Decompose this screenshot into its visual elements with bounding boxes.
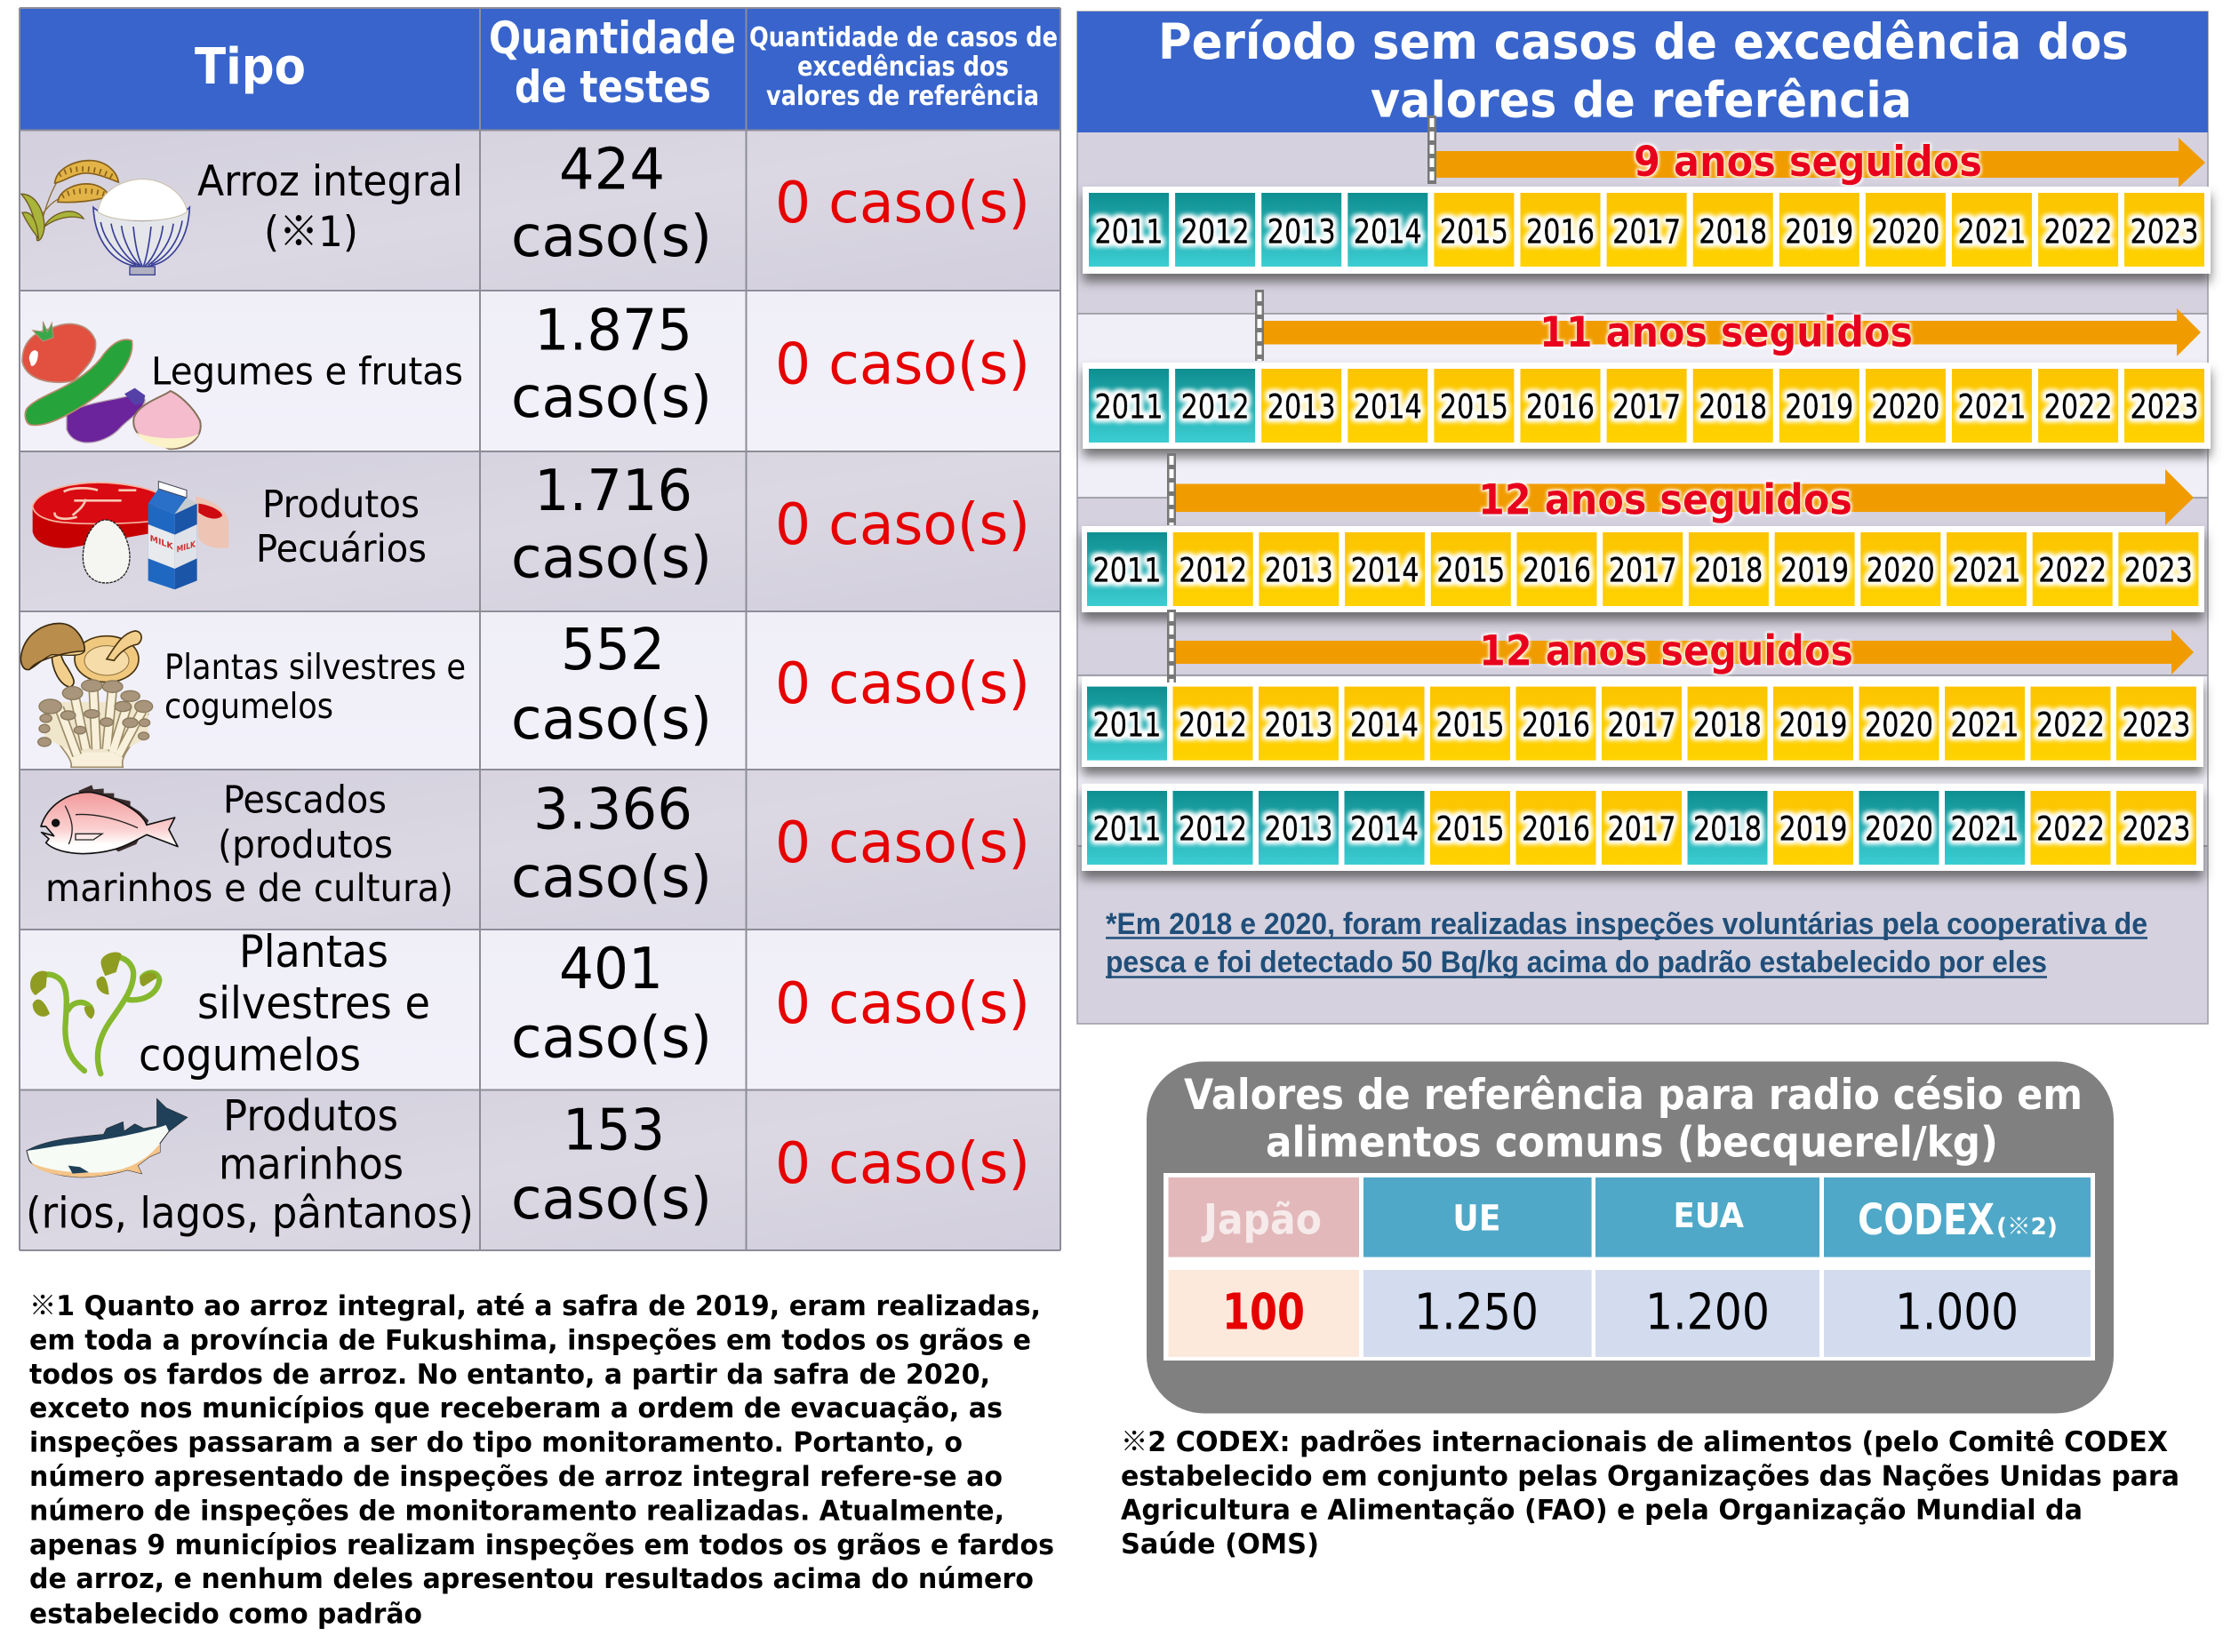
count: 1.716 xyxy=(511,459,712,592)
year labels: 2014 xyxy=(1354,387,1422,427)
footnote 1: arroz integral xyxy=(29,1283,1054,1630)
year labels: 2022 xyxy=(2036,706,2105,745)
year labels: 2019 xyxy=(1780,552,1849,590)
count: 424: caso(s) xyxy=(511,204,712,270)
count: 401 xyxy=(511,937,712,1072)
label: Produtos Pecuários xyxy=(256,483,427,571)
result: 0: 0 caso(s) xyxy=(775,1131,1030,1197)
year labels: 2015 xyxy=(1436,706,1504,745)
label: Produtos Pecuários: Pecuários xyxy=(256,527,427,571)
year labels: 2022 xyxy=(2044,213,2113,251)
year labels: 2016 xyxy=(1523,552,1591,590)
timeline 4: 12 years xyxy=(1082,610,2203,767)
count: 552: caso(s) xyxy=(511,687,712,753)
year strip xyxy=(1083,187,2211,274)
note: voluntary inspections: pesca e foi detectado 50 Bq/kg acima do padrão estabelecido por eles xyxy=(1106,946,2047,979)
footnote 2: CODEX: Agricultura e Alimentação (FAO) e pela Organização Mundial da xyxy=(1121,1495,2083,1527)
year labels: 2021 xyxy=(1950,810,2019,849)
year labels: 2019 xyxy=(1779,810,1847,849)
year labels: 2013 xyxy=(1264,810,1333,849)
year labels: 2016 xyxy=(1522,706,1590,745)
footnote 1: arroz integral: exceto nos municípios que receberam a ordem de evacuação, as xyxy=(29,1393,1003,1425)
label: Pescados: (produtos xyxy=(218,823,393,867)
year labels: 2018 xyxy=(1693,706,1762,745)
year labels: 2020 xyxy=(1865,706,1933,745)
column: CODEX: CODEX xyxy=(1858,1195,1995,1245)
arrow label: 9 anos seguidos xyxy=(1634,138,1982,187)
count: 1.875: 1.875 xyxy=(534,299,692,364)
year labels: 2012 xyxy=(1179,706,1247,745)
label: Arroz integral xyxy=(197,157,463,259)
label: Produtos marinhos: Produtos xyxy=(223,1091,398,1141)
row: Pescados xyxy=(41,777,1030,911)
year labels: 2020 xyxy=(1865,810,1933,849)
label: Arroz integral: (※1) xyxy=(264,197,358,259)
year labels: 2023 xyxy=(2130,213,2199,251)
year labels: 2015 xyxy=(1440,213,1508,251)
year labels: 2014 xyxy=(1354,213,1422,251)
column: Japão: Japão xyxy=(1201,1196,1322,1245)
label: Plantas silvestres e cogumelos: Plantas xyxy=(239,926,388,978)
icon: rice plant and bowl xyxy=(21,161,189,275)
year cells xyxy=(1089,369,2204,443)
year strip xyxy=(1082,784,2203,871)
column: UE xyxy=(1363,1177,1592,1357)
year labels xyxy=(1093,552,2193,590)
footnote 1: arroz integral: todos os fardos de arroz. No entanto, a partir da safra de 2020, xyxy=(29,1359,990,1391)
year labels: 2018 xyxy=(1694,552,1763,590)
column: CODEX: (※2) xyxy=(1996,1209,2058,1241)
label: Legumes e frutas: Legumes e frutas xyxy=(151,350,463,395)
icon: meat, egg and milk: MILK xyxy=(177,539,196,555)
row: Produtos Pecuários xyxy=(33,459,1030,592)
year labels: 2023 xyxy=(2123,810,2190,849)
footnote 1: arroz integral: número de inspeções de monitoramento realizadas. Atualmente, xyxy=(29,1495,1004,1527)
arrow label: 11 anos seguidos xyxy=(1539,308,1913,357)
panel title: valores de referência xyxy=(1371,72,1912,129)
footnote 1: arroz integral: estabelecido como padrão xyxy=(29,1598,422,1630)
label: Plantas silvestres e cogumelos xyxy=(139,926,430,1081)
count: 3.366: caso(s) xyxy=(511,845,712,911)
row: Legumes e frutas xyxy=(22,299,1030,449)
year labels: 2013 xyxy=(1264,706,1333,745)
year labels: 2021 xyxy=(1950,706,2019,745)
heading: Quantidade de testes xyxy=(489,12,736,113)
year labels xyxy=(1093,810,2190,849)
heading: Quantidade de testes: Quantidade xyxy=(489,12,736,64)
note: voluntary inspections xyxy=(1106,907,2147,979)
footnote 1: arroz integral: ※1 Quanto ao arroz integral, até a safra de 2019, eram realizadas, xyxy=(29,1283,1041,1323)
footnote 2: CODEX: Saúde (OMS) xyxy=(1121,1528,1319,1560)
year strip xyxy=(1082,526,2204,612)
year labels: 2012 xyxy=(1179,810,1247,849)
arrow label: 12 anos seguidos xyxy=(1478,476,1852,524)
timeline 3: 12 years xyxy=(1082,453,2204,612)
label: Pescados: Pescados xyxy=(223,778,387,823)
year cells xyxy=(1087,532,2198,606)
icon: mushrooms xyxy=(20,624,153,767)
year labels: 2012 xyxy=(1179,552,1247,590)
label: Produtos marinhos xyxy=(26,1091,474,1239)
icon: meat, egg and milk xyxy=(33,482,228,589)
year labels: 2021 xyxy=(1952,552,2021,590)
footnote 2: CODEX xyxy=(1121,1419,2179,1560)
label: Plantas silvestres e cogumelos: silvestres e xyxy=(197,978,430,1029)
arrow: 12 years xyxy=(1171,629,2194,674)
year labels: 2013 xyxy=(1265,552,1333,590)
heading: Tipo: Tipo xyxy=(195,38,306,96)
year labels: 2012 xyxy=(1181,213,1250,251)
row: Arroz integral xyxy=(21,138,1030,275)
year labels: 2011 xyxy=(1095,387,1163,427)
column: Japão xyxy=(1168,1177,1359,1357)
panel: test results table xyxy=(20,8,1060,1250)
count: 401: 401 xyxy=(559,937,663,1002)
year labels: 2017 xyxy=(1609,552,1677,590)
year labels: 2021 xyxy=(1957,387,2027,427)
panel title: alimentos comuns (becquerel/kg) xyxy=(1266,1119,1998,1168)
column: UE: UE xyxy=(1452,1199,1500,1240)
year labels: 2016 xyxy=(1522,810,1590,849)
year labels: 2020 xyxy=(1871,387,1939,427)
year labels: 2022 xyxy=(2036,810,2105,849)
arrow: 9 years xyxy=(1432,138,2205,188)
start marker xyxy=(1167,453,1176,525)
footnote 1: arroz integral: inspeções passaram a ser do tipo monitoramento. Portanto, o xyxy=(29,1427,963,1459)
result: 0: 0 caso(s) xyxy=(775,651,1030,717)
icon: fern sprouts xyxy=(30,952,159,1073)
label: Pescados xyxy=(45,778,453,911)
note: voluntary inspections: *Em 2018 e 2020, foram realizadas inspeções voluntárias pela cooperativa de xyxy=(1106,907,2147,941)
count: 552: 552 xyxy=(561,618,665,683)
year labels: 2012 xyxy=(1181,387,1250,427)
count: 3.366 xyxy=(511,777,712,911)
start marker xyxy=(1255,290,1264,361)
year labels: 2018 xyxy=(1693,810,1762,849)
panel background xyxy=(1147,1061,2114,1413)
panel: period without exceedances xyxy=(1077,12,2211,1024)
year labels: 2020 xyxy=(1871,213,1939,251)
count: 401: caso(s) xyxy=(511,1006,712,1072)
count: 153: 153 xyxy=(563,1098,665,1164)
year labels: 2015 xyxy=(1440,387,1508,427)
year labels: 2011 xyxy=(1093,706,1161,745)
heading: Quantidade de casos: valores de referência xyxy=(766,81,1039,112)
start marker xyxy=(1427,116,1436,184)
column: UE: 1.250 xyxy=(1414,1284,1539,1342)
reference table xyxy=(1163,1173,2095,1361)
footnote 2: CODEX: ※2 CODEX: padrões internacionais de alimentos (pelo Comitê CODEX xyxy=(1121,1419,2168,1459)
label: Pescados: marinhos e de cultura) xyxy=(45,866,453,911)
label: Plantas silvestres e cogumelos: Plantas silvestres e xyxy=(164,648,466,688)
column: EUA: 1.200 xyxy=(1645,1284,1770,1342)
year strip xyxy=(1082,677,2203,767)
panel title xyxy=(1184,1071,2083,1168)
year labels: 2015 xyxy=(1436,810,1504,849)
arrow: 12 years xyxy=(1171,469,2194,525)
heading: Quantidade de casos xyxy=(749,22,1058,112)
column: Japão: 100 xyxy=(1222,1284,1305,1342)
year labels xyxy=(1093,706,2190,745)
count: 153: caso(s) xyxy=(511,1167,712,1233)
count: 3.366: 3.366 xyxy=(533,777,692,842)
heading: Quantidade de casos: excedências dos xyxy=(797,52,1009,83)
year labels: 2014 xyxy=(1350,810,1419,849)
result: 0: 0 caso(s) xyxy=(775,332,1030,398)
footnote 1: arroz integral: de arroz, e nenhum deles apresentou resultados acima do número xyxy=(29,1563,1034,1595)
year labels: 2017 xyxy=(1607,810,1676,849)
count: 1.875 xyxy=(511,299,712,431)
year labels: 2011 xyxy=(1093,552,1161,590)
icon: sea bream xyxy=(41,785,178,854)
year labels: 2013 xyxy=(1267,387,1336,427)
panel: reference values xyxy=(1147,1061,2114,1413)
column: CODEX xyxy=(1824,1177,2091,1357)
label: Produtos Pecuários: Produtos xyxy=(262,483,420,527)
count: 1.716: 1.716 xyxy=(534,459,692,524)
column: CODEX: 1.000 xyxy=(1895,1284,2019,1342)
start marker xyxy=(1167,610,1176,682)
timeline 2: 11 years xyxy=(1083,290,2211,449)
year labels: 2023 xyxy=(2130,387,2199,427)
footnote 1: arroz integral: número apresentado de inspeções de arroz integral refere-se ao xyxy=(29,1461,1003,1493)
panel title: Período sem casos de excedência dos xyxy=(1158,13,2129,70)
year labels: 2019 xyxy=(1779,706,1847,745)
row: Plantas silvestres (fern) xyxy=(30,926,1030,1081)
result: 0: 0 caso(s) xyxy=(775,971,1030,1037)
table header row xyxy=(20,8,1060,130)
heading: Quantidade de casos: Quantidade de casos de xyxy=(749,22,1058,53)
result: 0: 0 caso(s) xyxy=(775,492,1030,558)
panel title: Valores de referência para radio césio em xyxy=(1184,1071,2083,1120)
count: 1.875: caso(s) xyxy=(511,365,712,431)
count: 424 xyxy=(511,138,712,270)
year labels: 2023 xyxy=(2124,552,2193,590)
year cells xyxy=(1089,193,2204,267)
timeline 5: voluntary inspections xyxy=(1082,784,2203,871)
year labels: 2015 xyxy=(1436,552,1505,590)
panel background stripes xyxy=(1077,12,2208,1024)
label: Produtos marinhos: (rios, lagos, pântanos) xyxy=(26,1189,474,1239)
year labels: 2014 xyxy=(1351,552,1419,590)
count: 1.716: caso(s) xyxy=(511,526,712,592)
count: 552 xyxy=(511,618,712,753)
year labels: 2017 xyxy=(1612,213,1681,251)
year labels: 2018 xyxy=(1699,387,1767,427)
year labels: 2019 xyxy=(1785,387,1853,427)
year cells xyxy=(1087,791,2196,865)
count: 153 xyxy=(511,1098,712,1233)
icon: vegetables and fruits xyxy=(22,322,201,449)
timeline 1: 9 years xyxy=(1083,116,2211,274)
footnote 1: arroz integral: em toda a província de Fukushima, inspeções em todos os grãos e xyxy=(29,1324,1031,1356)
row: Produtos marinhos xyxy=(26,1091,1030,1239)
year labels: 2017 xyxy=(1612,387,1681,427)
heading: Quantidade de testes: de testes xyxy=(515,61,711,113)
icon: meat, egg and milk: MILK xyxy=(150,534,173,552)
year labels: 2022 xyxy=(2044,387,2113,427)
year labels xyxy=(1095,213,2199,251)
year labels: 2014 xyxy=(1350,706,1419,745)
year labels: 2011 xyxy=(1093,810,1161,849)
icon: salmon xyxy=(27,1099,188,1177)
label: Arroz integral: Arroz integral xyxy=(197,157,463,206)
year cells xyxy=(1087,687,2196,761)
year labels: 2016 xyxy=(1526,213,1595,251)
label: Plantas silvestres e cogumelos: cogumelos xyxy=(139,1029,361,1081)
footnote 1: arroz integral: apenas 9 municípios realizam inspeções em todos os grãos e fardos xyxy=(29,1529,1054,1561)
year labels: 2011 xyxy=(1095,213,1163,251)
arrow label: 12 anos seguidos xyxy=(1479,627,1853,675)
column: EUA xyxy=(1595,1177,1819,1357)
column: EUA: EUA xyxy=(1673,1196,1745,1235)
panel title xyxy=(1077,12,2208,132)
result: 0: 0 caso(s) xyxy=(775,810,1030,876)
year labels: 2017 xyxy=(1607,706,1676,745)
label: Plantas silvestres e cogumelos xyxy=(164,648,466,727)
year strip xyxy=(1083,363,2211,449)
year labels: 2019 xyxy=(1785,213,1853,251)
result: 0: 0 caso(s) xyxy=(775,171,1030,236)
arrow: 11 years xyxy=(1259,308,2201,356)
table row backgrounds xyxy=(20,8,1060,1250)
year labels: 2021 xyxy=(1957,213,2027,251)
year labels: 2020 xyxy=(1867,552,1935,590)
count: 424: 424 xyxy=(559,138,665,204)
year labels: 2018 xyxy=(1699,213,1767,251)
label: Produtos marinhos: marinhos xyxy=(219,1139,404,1189)
year labels: 2016 xyxy=(1526,387,1595,427)
year labels xyxy=(1095,387,2199,427)
label: Plantas silvestres e cogumelos: cogumelos xyxy=(164,687,333,727)
year labels: 2022 xyxy=(2038,552,2107,590)
year labels: 2023 xyxy=(2123,706,2190,745)
row: Plantas silvestres e cogumelos xyxy=(20,618,1030,767)
footnote 2: CODEX: estabelecido em conjunto pelas Organizações das Nações Unidas para xyxy=(1121,1460,2179,1492)
year labels: 2013 xyxy=(1267,213,1336,251)
